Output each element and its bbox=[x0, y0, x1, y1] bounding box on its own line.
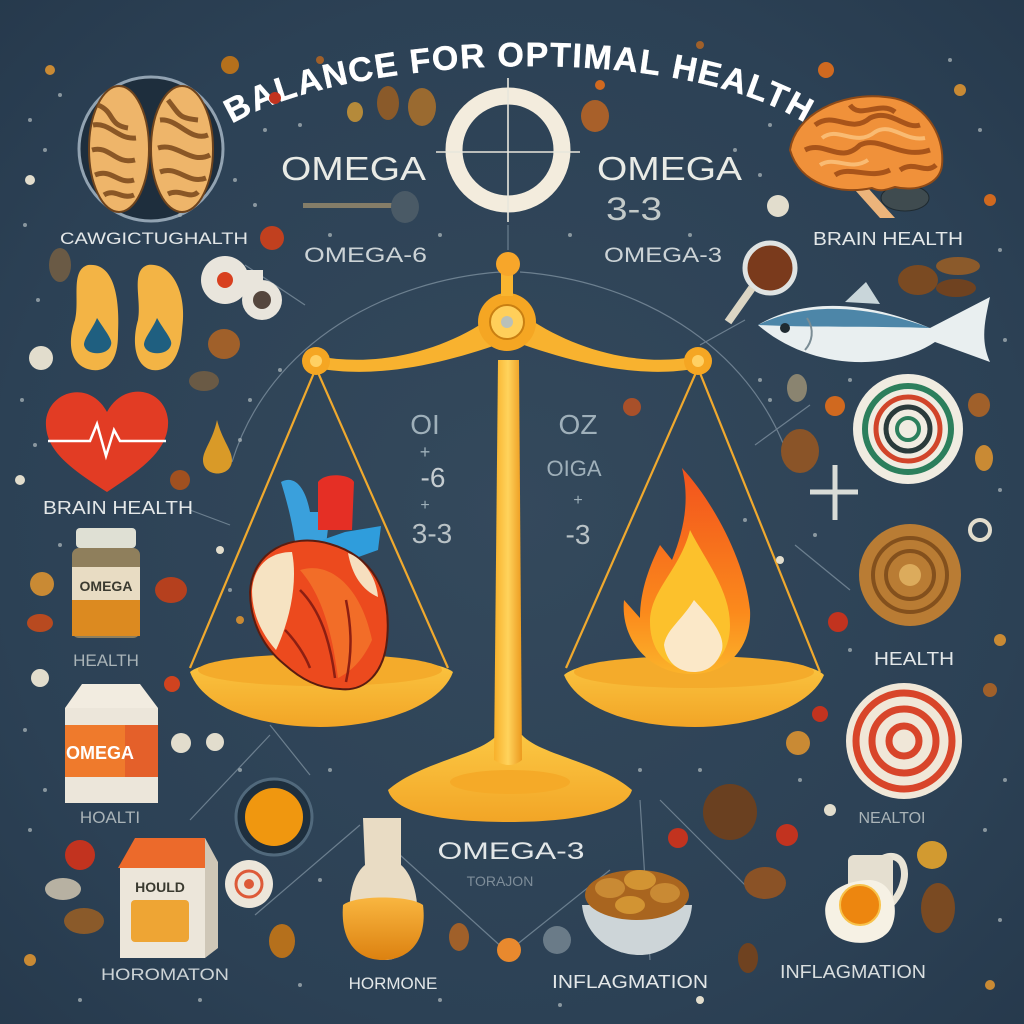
scale pole bbox=[494, 360, 522, 765]
icon: oil drop bbox=[203, 420, 232, 474]
label: inflammation right: INFLAGMATION bbox=[780, 962, 926, 982]
icon: omega supplement jar bbox=[72, 528, 140, 638]
icon: food carton bbox=[118, 838, 218, 958]
label: horomaton: HOROMATON bbox=[101, 965, 229, 984]
label: omega-6: OMEGA-6 bbox=[304, 244, 427, 267]
scale beam bbox=[316, 318, 698, 372]
scale numbers right: -3 bbox=[566, 519, 590, 550]
balance scale bbox=[190, 252, 824, 822]
heading: omega right: 3-3 bbox=[606, 191, 662, 227]
icon: node dot bbox=[497, 938, 521, 962]
connector lines and arcs bbox=[190, 225, 850, 960]
icon: red heart with pulse bbox=[46, 392, 168, 492]
scale pivot bbox=[478, 293, 536, 351]
icon: brain side view bbox=[790, 96, 942, 218]
icon: spiral dot bbox=[225, 860, 273, 908]
scale numbers left: + bbox=[420, 442, 430, 462]
icon: magnifying glass bbox=[728, 243, 795, 322]
label: torajon: TORAJON bbox=[467, 873, 533, 889]
label: brain health left: BRAIN HEALTH bbox=[43, 498, 193, 518]
scale numbers left: OI bbox=[410, 409, 440, 440]
scale numbers right: OIGA bbox=[546, 456, 602, 481]
icon: fish bbox=[758, 282, 990, 362]
icon: egg jug bbox=[825, 855, 904, 943]
icon: green red target bbox=[853, 374, 963, 484]
left pan bbox=[190, 656, 453, 727]
scale numbers right: + bbox=[573, 492, 583, 509]
icon: linked circles bbox=[201, 256, 282, 320]
icon: nuts top right bbox=[898, 257, 980, 297]
label: health lower left: HOALTI bbox=[80, 808, 140, 827]
label: cardiovascular health: CAWGICTUGHALTH bbox=[60, 229, 248, 248]
label: brain health top right: BRAIN HEALTH bbox=[813, 229, 963, 249]
label: omega-3: OMEGA-3 bbox=[604, 244, 722, 267]
scale base bbox=[388, 735, 632, 822]
heading: omega right: OMEGA bbox=[597, 150, 742, 187]
icon: omega ring with crosshair bbox=[436, 78, 580, 222]
icon: brain top view in ring bbox=[79, 77, 223, 221]
icon: flame bbox=[624, 468, 750, 674]
icon: omega supplement jar: OMEGA bbox=[80, 578, 132, 594]
heading: omega right bbox=[597, 150, 742, 227]
scale numbers left bbox=[410, 409, 452, 549]
scale right chains bbox=[566, 368, 820, 672]
label: hormone: HORMONE bbox=[349, 974, 437, 993]
label: health left: HEALTH bbox=[73, 651, 139, 670]
scale numbers right: OZ bbox=[559, 409, 597, 440]
scale numbers left: -6 bbox=[421, 462, 445, 493]
right pan bbox=[564, 656, 824, 727]
icon: red spiral plate bbox=[846, 683, 962, 799]
icon: orange yolk circle bbox=[236, 779, 312, 855]
decorative smudge bar bbox=[303, 191, 419, 223]
icon: sparkle plus bbox=[810, 465, 858, 520]
scale numbers left: + bbox=[420, 497, 430, 514]
label: health right: HEALTH bbox=[874, 649, 954, 669]
heading: omega left: OMEGA bbox=[281, 150, 426, 187]
icon: swirl pastry bbox=[859, 524, 961, 626]
label: inflagmation centre: INFLAGMATION bbox=[552, 972, 708, 992]
scale left chains bbox=[190, 368, 448, 668]
icon: food carton: HOULD bbox=[135, 879, 185, 895]
icon: flask with oil bbox=[343, 818, 424, 960]
label: nealtoi: NEALTOI bbox=[859, 810, 925, 827]
label: omega-3 bottom: OMEGA-3 bbox=[438, 838, 584, 865]
icon: omega carton bbox=[65, 684, 158, 803]
title: BALANCE FOR OPTIMAL HEALTH bbox=[222, 42, 814, 123]
icon: anatomical heart bbox=[250, 475, 388, 689]
scale numbers right bbox=[546, 409, 602, 550]
icon: walnut right bbox=[781, 429, 819, 473]
scale numbers left: 3-3 bbox=[412, 518, 452, 549]
icon: kidney drops bbox=[71, 265, 183, 370]
icon: walnut bowl bbox=[582, 870, 692, 955]
icon: omega carton: OMEGA bbox=[66, 743, 134, 763]
